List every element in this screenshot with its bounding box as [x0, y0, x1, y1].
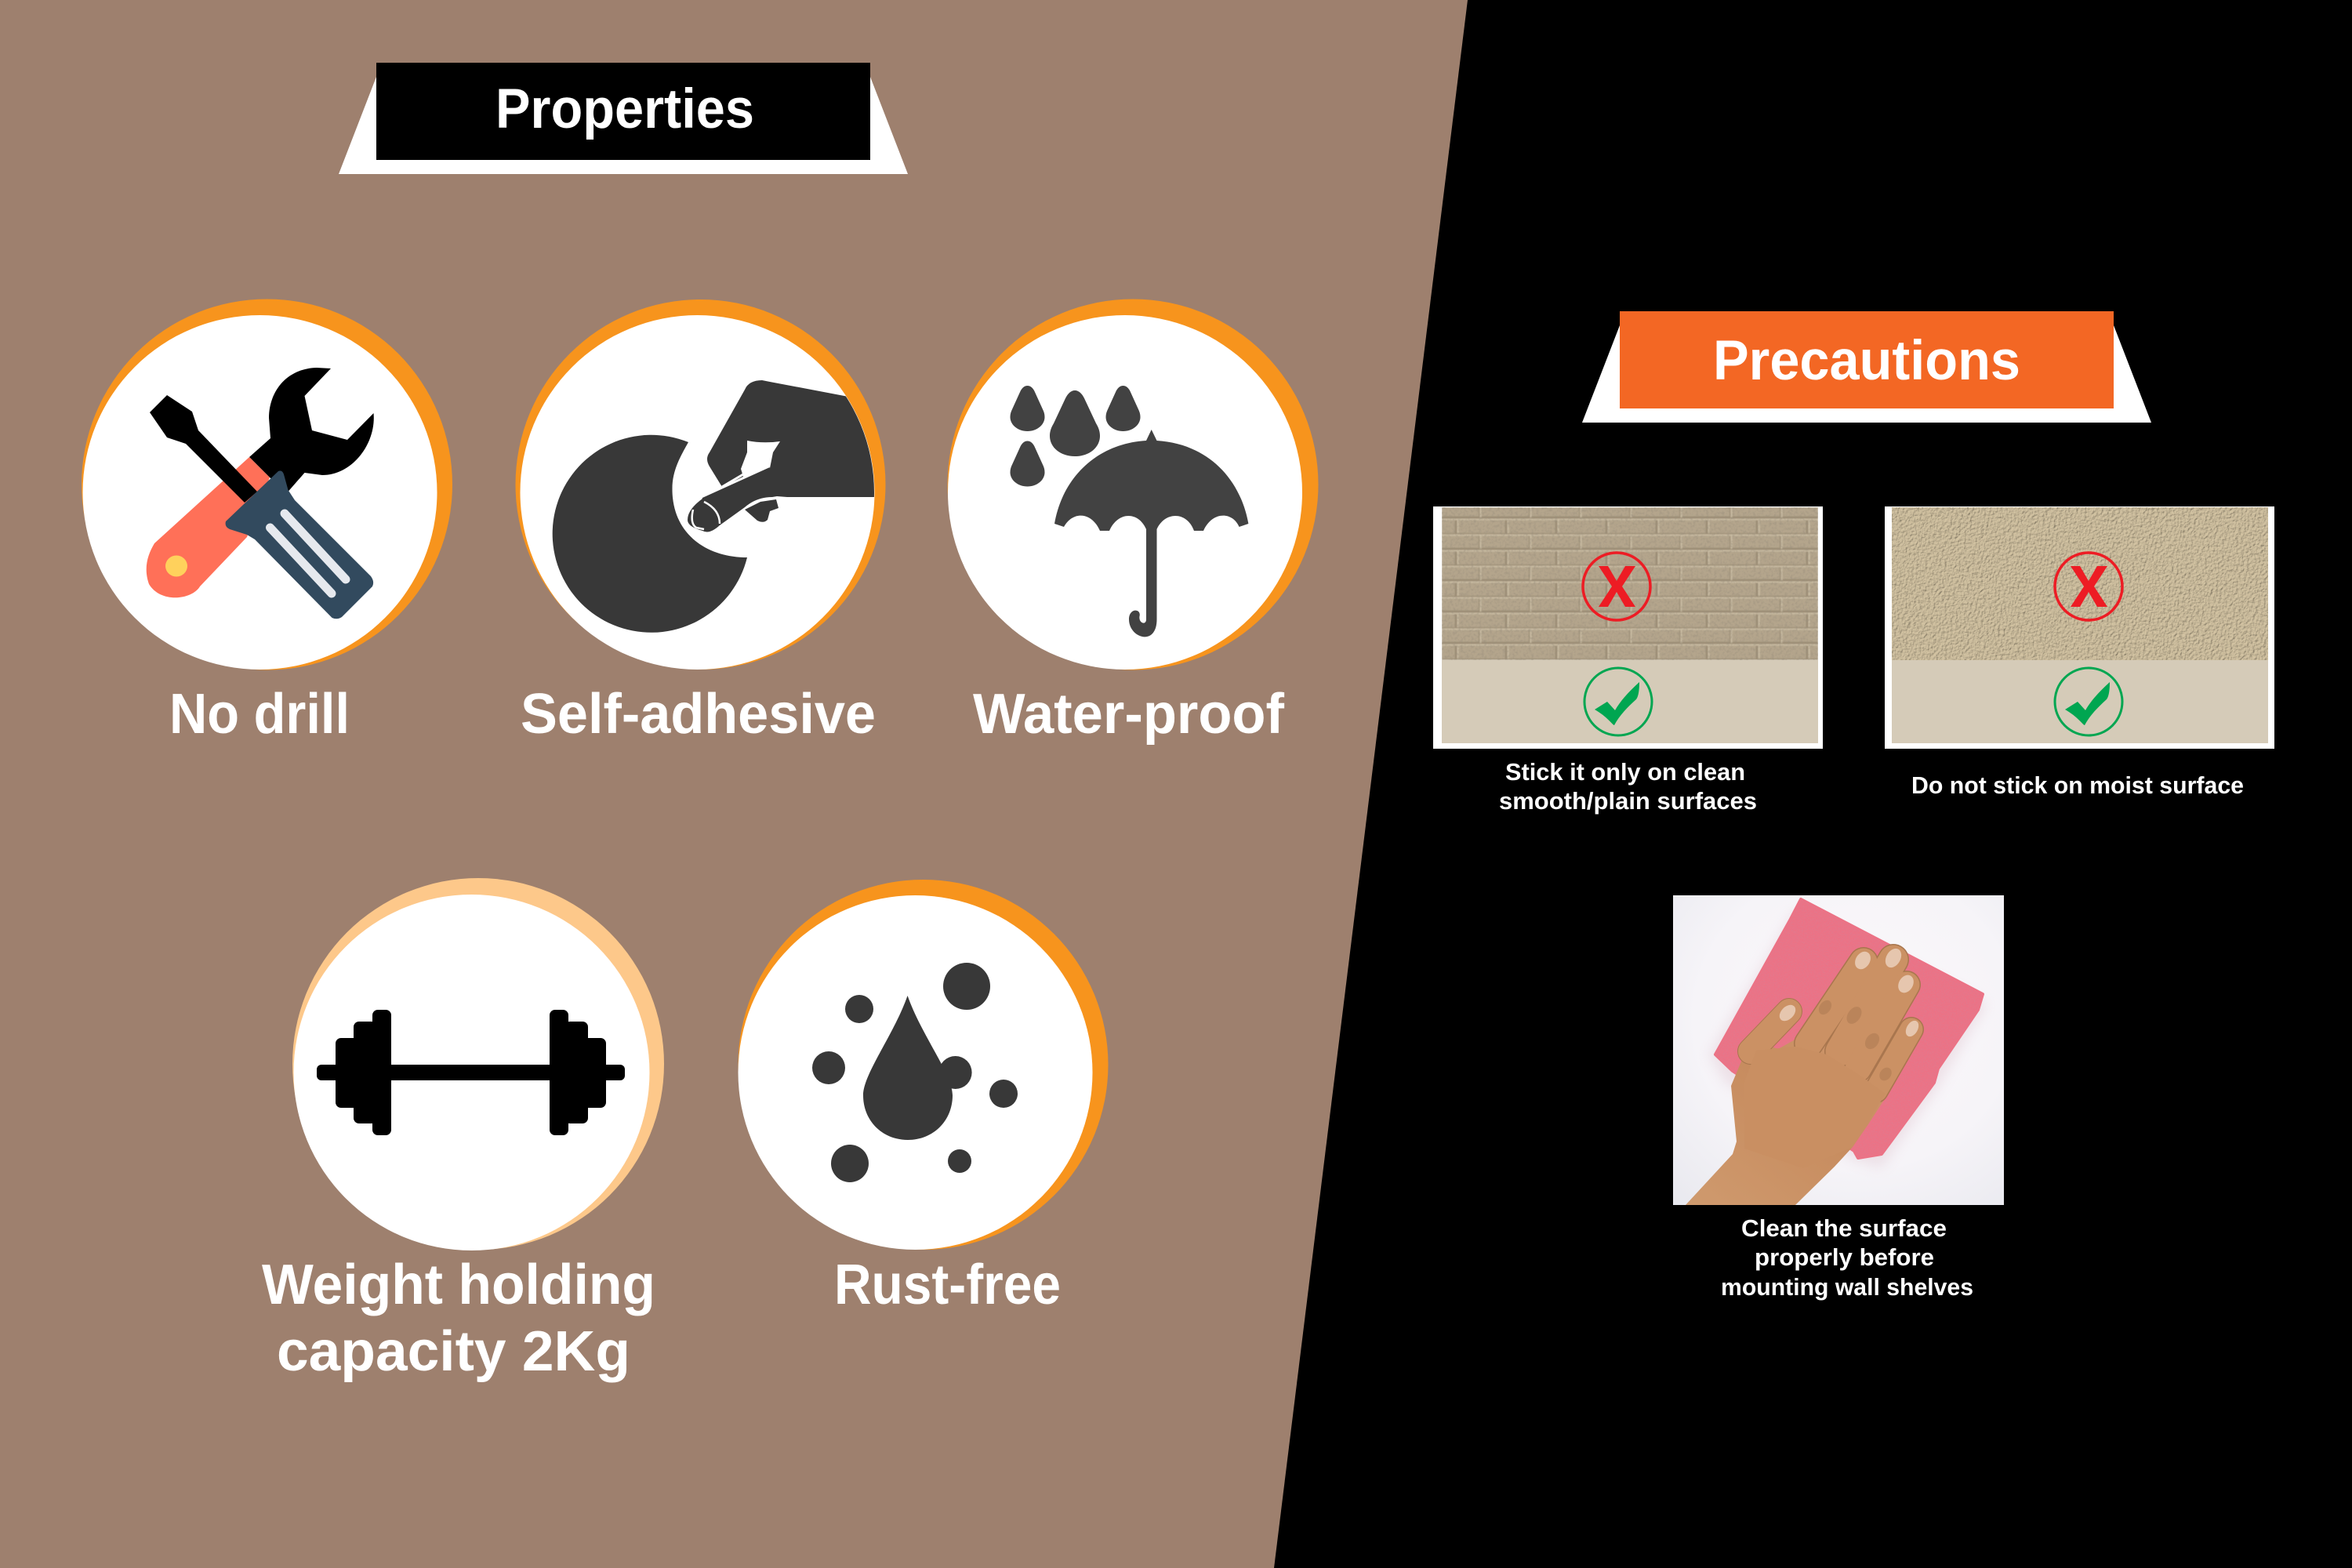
- label: Weight holding capacity 2Kg: Weight holding: [262, 1254, 655, 1316]
- caption: clean the surface: mounting wall shelves: [1721, 1273, 1973, 1301]
- fingernails: [1777, 946, 1922, 1039]
- icon: rust-free, drop and dots: [739, 880, 1109, 1250]
- caption: clean the surface: [1721, 1214, 1973, 1301]
- caption: stick on clean surfaces: [1499, 758, 1757, 815]
- caption: clean the surface: properly before: [1755, 1243, 1934, 1271]
- icon: green check: [2055, 668, 2122, 735]
- knuckle shading: [1819, 1000, 1891, 1080]
- icon: red cross: [1583, 553, 1650, 620]
- caption: do not stick on moist surface: Do not stick on moist surface: [1911, 771, 2244, 799]
- label: Self-adhesive: Self-adhesive: [521, 683, 876, 746]
- caption: stick on clean surfaces: smooth/plain surfaces: [1499, 787, 1757, 815]
- caption: stick on clean surfaces: Stick it only on clean: [1505, 758, 1745, 786]
- panel: textured versus smooth surface: [1885, 506, 2274, 749]
- heading: Properties: Properties: [495, 78, 754, 140]
- icon: green check: [1584, 668, 1652, 735]
- icon: red cross: [2055, 553, 2122, 620]
- icon: no drill, wrench and screwdriver: [82, 299, 452, 670]
- label: Rust-free: Rust-free: [834, 1254, 1061, 1316]
- label: Water-proof: Water-proof: [973, 683, 1285, 746]
- icon: self-adhesive, hand peeling disc: [516, 299, 886, 670]
- heading: Precautions: Precautions: [1713, 330, 2020, 392]
- towel: [1709, 895, 1991, 1166]
- icon: weight holding, barbell: [292, 878, 664, 1250]
- panel: brick versus smooth surface: [1433, 506, 1823, 749]
- label: Weight holding capacity 2Kg: [262, 1254, 655, 1383]
- picture: hand wiping surface with pink towel: [1673, 895, 2004, 1205]
- label: No drill: No drill: [169, 683, 350, 746]
- caption: clean the surface: Clean the surface: [1741, 1214, 1947, 1242]
- hand: [1686, 946, 1922, 1205]
- icon: water-proof, umbrella and rain: [947, 299, 1319, 670]
- label: Weight holding capacity 2Kg: capacity 2Kg: [277, 1320, 630, 1383]
- panel: properties tan background: [0, 0, 1468, 1568]
- heading: Precautions: [1582, 311, 2151, 423]
- heading: Properties: [339, 63, 908, 174]
